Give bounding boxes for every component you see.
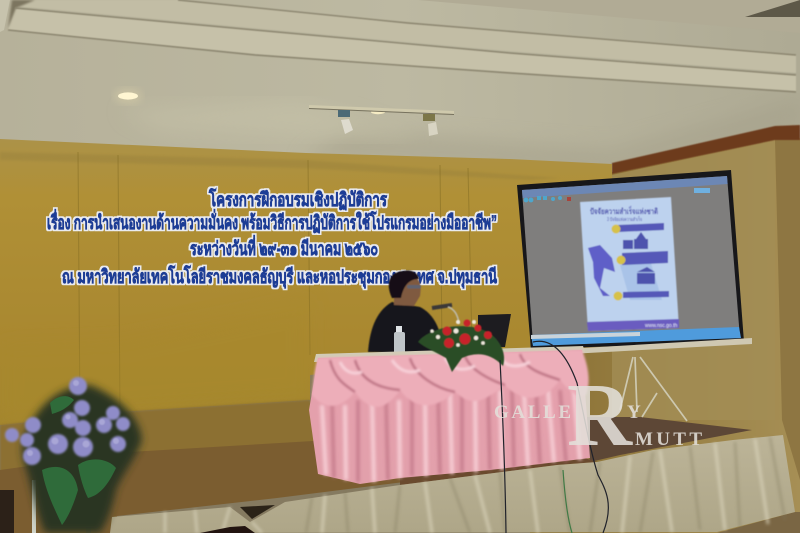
title bar xyxy=(522,176,728,198)
watermark: GALLERY RMUTT: MUTT xyxy=(635,429,702,450)
stage skirt xyxy=(110,435,795,533)
neck and face xyxy=(394,274,421,306)
projection screen xyxy=(517,170,744,349)
line 4: ณ มหาวิทยาลัยเทคโนโลยีราชมงคลธัญบุรี และหอประชุมกองสนเทศ จ.ปทุมธานี xyxy=(62,265,497,289)
slide item 1 xyxy=(612,223,664,234)
purple flower clusters xyxy=(5,377,130,465)
line 2: เรื่อง การนำเสนองานด้านความมั่นคง พร้อมวิธีการปฏิบัติการใช้โปรแกรมอย่างมืออาชีพ” xyxy=(47,209,497,234)
toolbar icons xyxy=(524,188,710,202)
screen bottom bar xyxy=(531,338,752,356)
infographic slide on screen: www.nsc.go.th xyxy=(645,323,677,329)
slide heading: ปัจจัยความสำเร็จแห่งชาติ xyxy=(590,205,658,216)
watermark: GALLERY RMUTT xyxy=(494,366,702,465)
line 3: ระหว่างวันที่ ๒๙-๓๑ มีนาคม ๒๕๖๐ xyxy=(190,235,378,260)
watermark: GALLERY RMUTT: Y xyxy=(627,402,641,423)
screen surface xyxy=(522,176,740,344)
watermark: GALLERY RMUTT: GALLE xyxy=(494,402,571,423)
gap in stage skirt xyxy=(240,505,275,519)
plant stand xyxy=(32,480,36,533)
pink table xyxy=(309,346,590,484)
body xyxy=(368,302,440,354)
slide footer bar xyxy=(587,319,679,331)
slide building icons xyxy=(623,232,655,284)
projector tripod xyxy=(620,357,687,421)
glasses xyxy=(407,285,421,288)
water bottle xyxy=(394,326,405,357)
screen frame xyxy=(517,170,744,349)
cables xyxy=(500,341,608,533)
banner text: Thai event title xyxy=(47,188,497,289)
windows taskbar xyxy=(531,327,741,346)
slide item 3 xyxy=(614,291,669,300)
watermark: GALLERY RMUTT: R xyxy=(567,366,633,465)
left flower plant xyxy=(5,377,142,533)
fern leaves xyxy=(42,396,116,525)
stage floor xyxy=(0,417,800,533)
lower wall below curtain xyxy=(0,400,320,480)
presenter xyxy=(368,270,459,354)
line 1: โครงการฝึกอบรมเชิงปฏิบัติการ xyxy=(208,188,388,211)
ceiling lights and spotlights xyxy=(114,88,454,136)
laptop xyxy=(478,314,511,347)
table pleats xyxy=(322,390,580,482)
microphone xyxy=(432,305,459,324)
infographic slide on screen: 3 ปัจจัยแห่งความสำเร็จ xyxy=(607,215,642,223)
slide item 2 xyxy=(616,251,668,265)
banner curtain xyxy=(0,139,612,425)
flower arrangement on table xyxy=(418,320,504,372)
wood trim xyxy=(612,125,800,174)
red and black object xyxy=(200,526,255,533)
right wall xyxy=(530,138,800,533)
ceiling xyxy=(0,0,800,180)
table swags xyxy=(312,350,589,407)
slide map xyxy=(588,245,615,296)
hair xyxy=(389,270,419,298)
left edge dark stand xyxy=(0,490,14,533)
infographic slide on screen xyxy=(580,197,679,331)
skirt pleats xyxy=(165,437,785,533)
